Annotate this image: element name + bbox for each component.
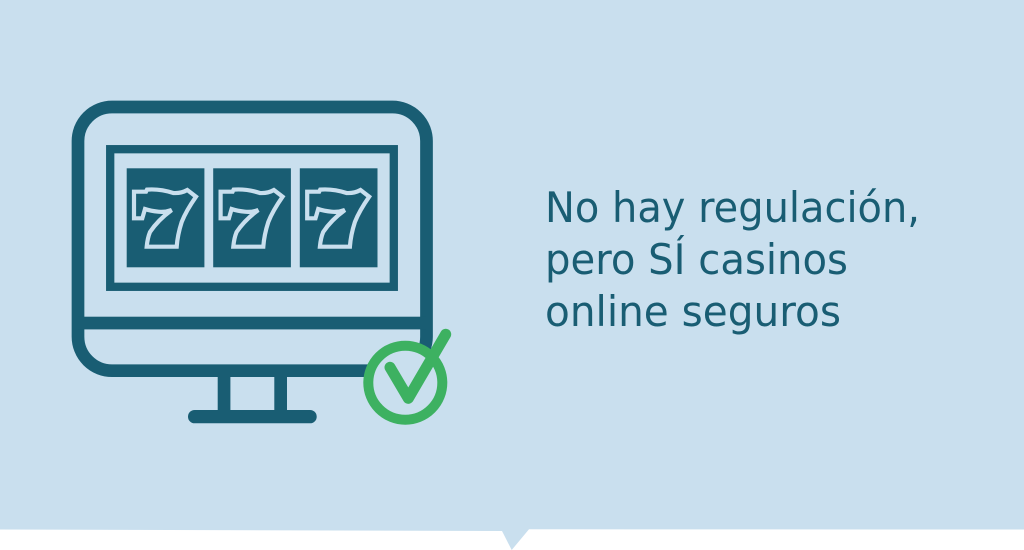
monitor divider <box>78 317 426 329</box>
icon: green check mark <box>368 334 446 420</box>
reel 2 <box>213 168 291 267</box>
heading text: online seguros <box>545 287 841 336</box>
heading text: No hay regulación, <box>545 183 920 232</box>
heading text <box>545 183 920 336</box>
monitor stand <box>188 376 317 423</box>
slot machine frame <box>110 149 394 287</box>
heading text: pero SÍ casinos <box>545 235 848 284</box>
icon: slot machine monitor <box>78 107 426 423</box>
reel 3 <box>300 168 378 267</box>
reel 1 <box>127 168 204 267</box>
monitor frame <box>78 107 426 371</box>
